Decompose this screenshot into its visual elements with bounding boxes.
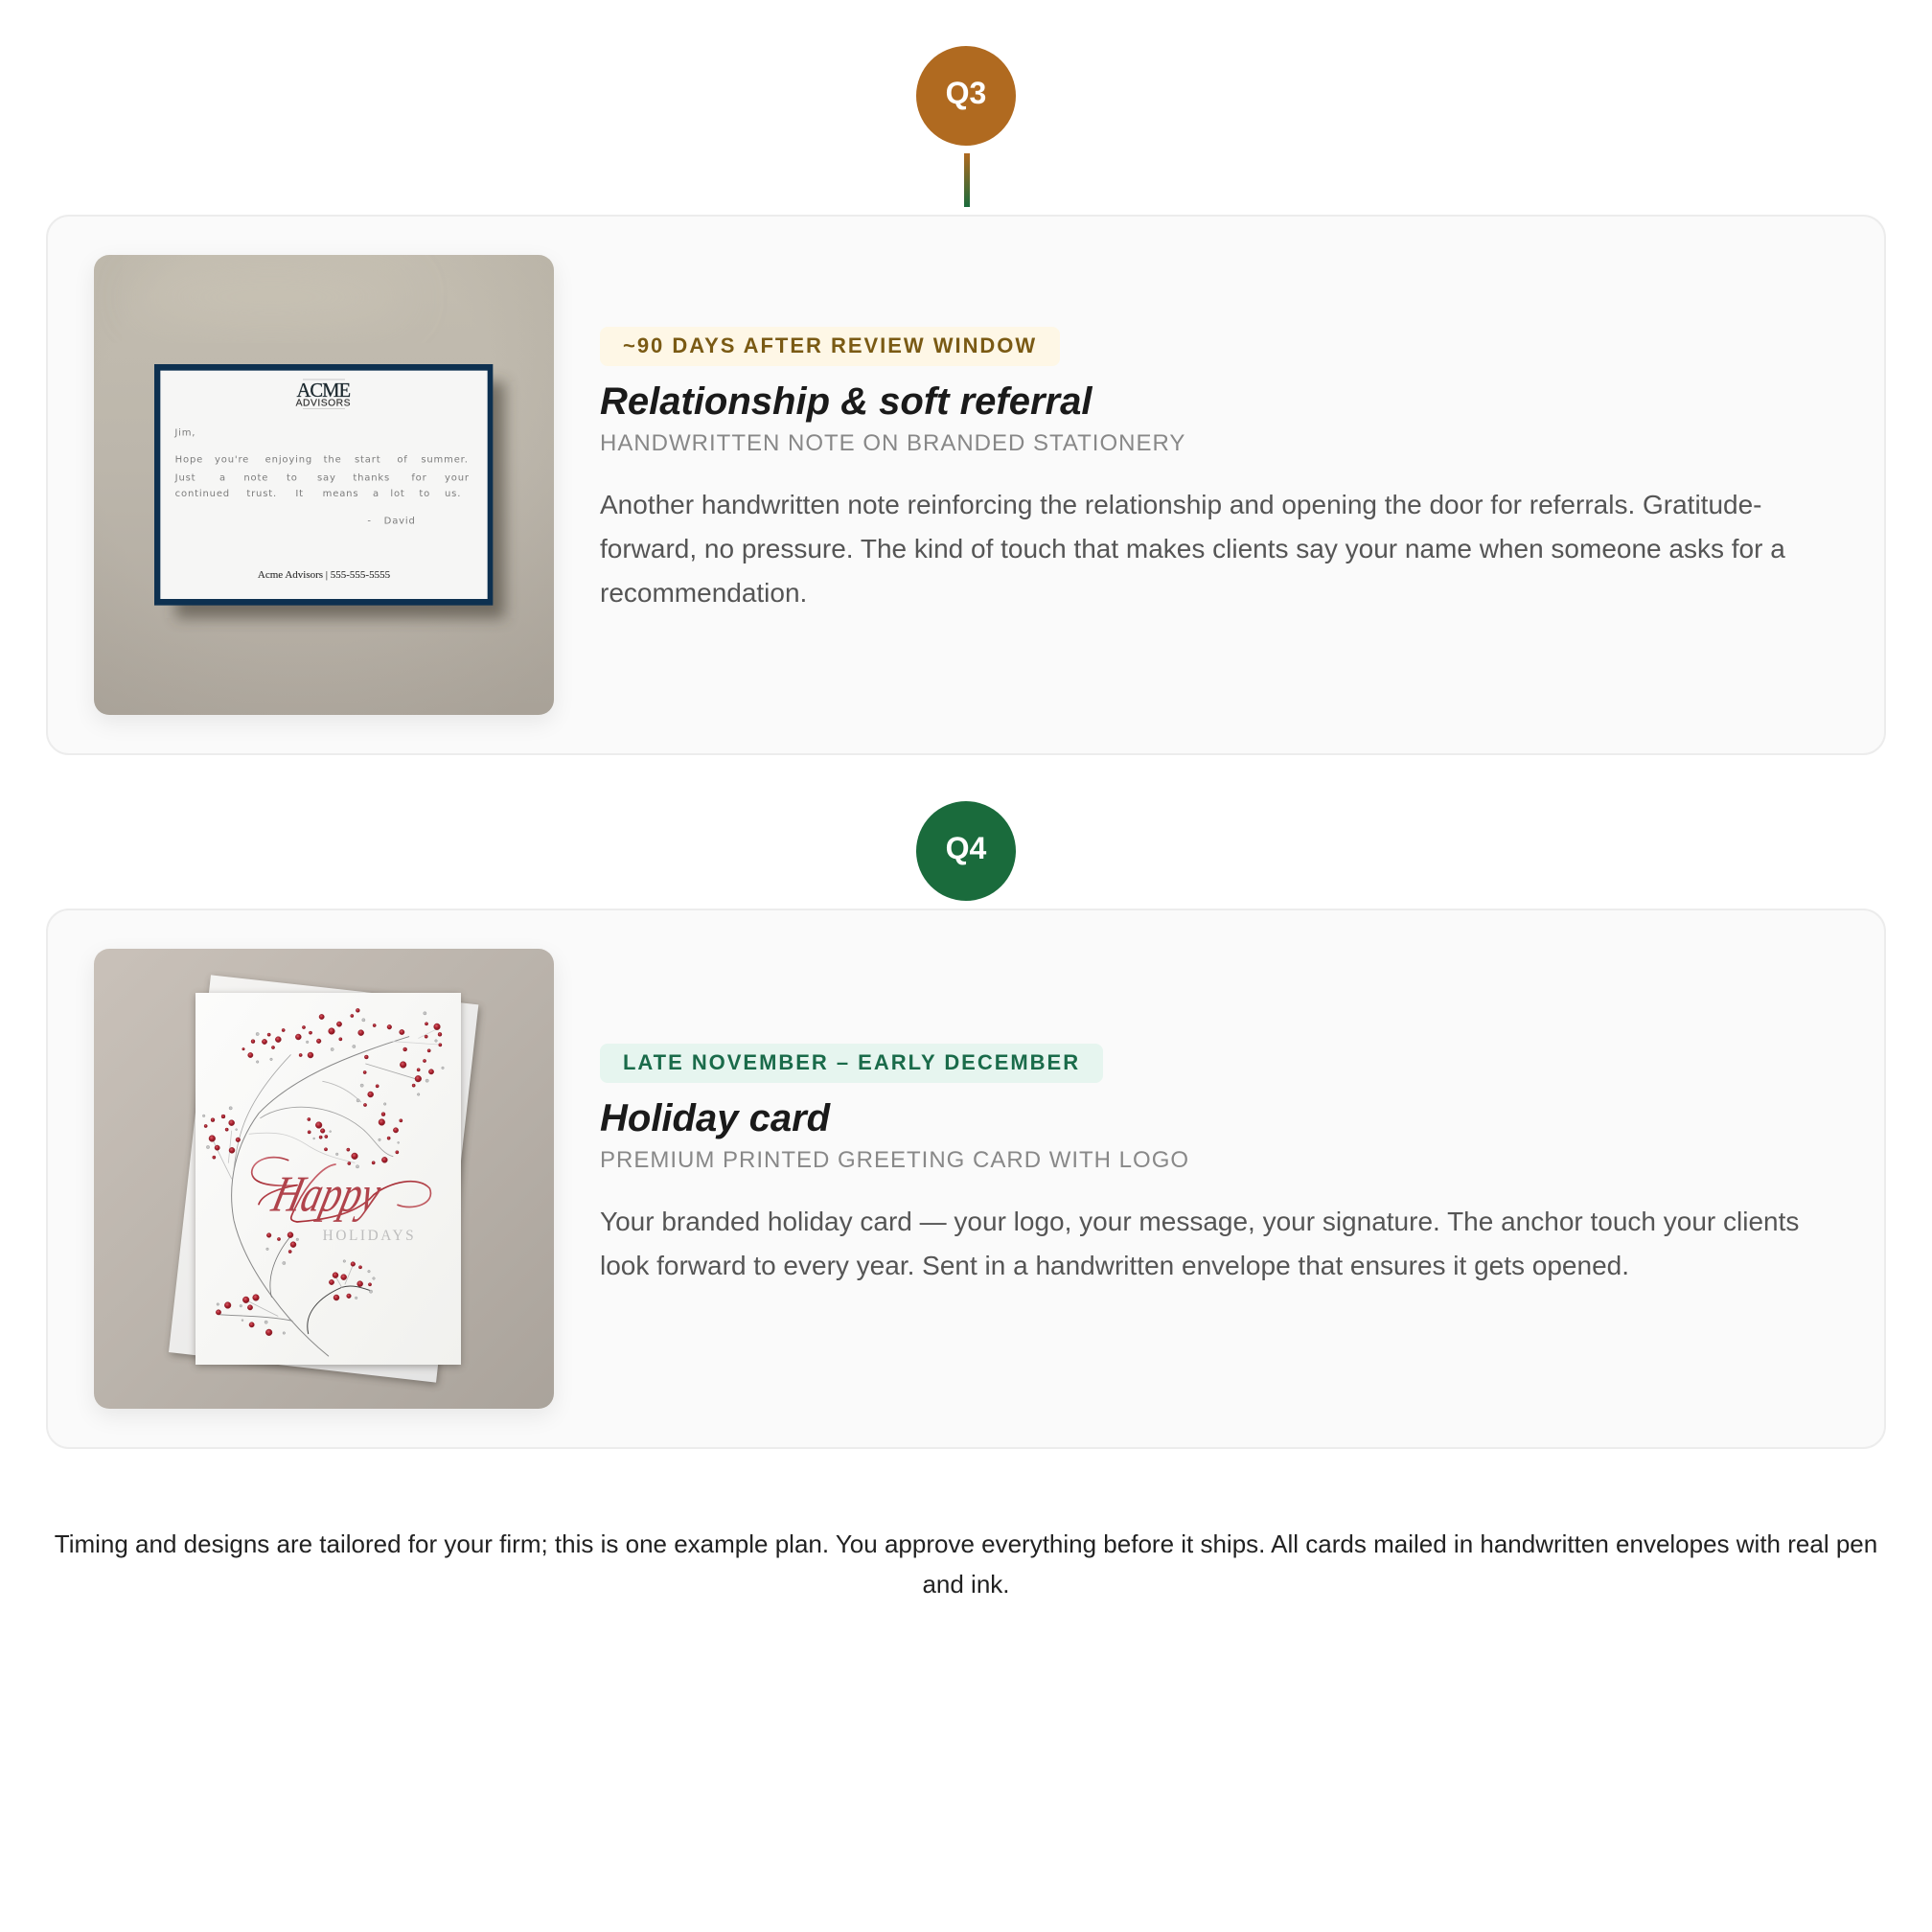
note shadow <box>175 381 505 618</box>
note card <box>154 364 493 606</box>
handwritten message: summer. <box>421 454 469 465</box>
handwritten message: you're <box>215 454 249 465</box>
handwritten message: for <box>411 472 427 483</box>
handwritten message: the <box>324 454 342 465</box>
timing pill <box>600 327 1060 366</box>
card subtitle: PREMIUM PRINTED GREETING CARD WITH LOGO <box>600 1147 1189 1173</box>
Q4 badge: Q4 <box>946 831 986 865</box>
panel: Q3 card <box>46 215 1886 755</box>
greeting script: Happy <box>266 1165 387 1222</box>
handwritten message: continued <box>175 489 230 499</box>
logo: ACME <box>296 380 351 402</box>
logo: ADVISORS <box>296 399 351 409</box>
handwritten message: Jim, <box>173 427 196 438</box>
envelope <box>170 978 480 1385</box>
handwritten message: trust. <box>246 489 277 499</box>
handwritten message: enjoying <box>265 454 312 465</box>
handwritten message: of <box>397 454 408 465</box>
timing pill <box>600 1044 1103 1083</box>
handwritten message: - <box>367 517 372 527</box>
handwritten message: say <box>317 472 336 483</box>
handwritten message: It <box>295 489 304 499</box>
Q4 badge <box>916 801 1016 901</box>
note footer: Acme Advisors | 555-555-5555 <box>258 569 391 581</box>
footnote: Timing and designs are tailored for your firm; this is one example plan. You approve everything before it ships. All cards mailed in handwritten envelopes with real pen and ink. <box>55 1530 1877 1598</box>
image: handwritten note on branded stationery <box>94 255 554 715</box>
handwritten message: your <box>445 472 470 483</box>
card title: Relationship & soft referral <box>600 380 1092 423</box>
handwritten message: means <box>323 489 358 499</box>
greeting holidays: HOLIDAYS <box>323 1228 414 1244</box>
handwritten message: Just <box>174 472 196 483</box>
timeline connector <box>964 153 970 207</box>
handwritten message: to <box>287 472 298 483</box>
Q3 badge <box>916 46 1016 146</box>
timing pill: ~90 DAYS AFTER REVIEW WINDOW <box>623 334 1037 357</box>
handwritten message: a <box>373 489 380 499</box>
silver berries <box>202 1012 444 1334</box>
handwritten message: David <box>384 517 416 527</box>
logo <box>296 380 351 409</box>
card front <box>196 993 461 1367</box>
card description: Your branded holiday card — your logo, your message, your signature. The anchor touch your clients look forward to every year. Sent in a handwritten envelope that ensures it gets opened. <box>600 1207 1799 1280</box>
Q3 badge: Q3 <box>946 76 986 110</box>
berries <box>204 1008 442 1336</box>
handwritten message: a <box>219 472 226 483</box>
card subtitle: HANDWRITTEN NOTE ON BRANDED STATIONERY <box>600 430 1185 456</box>
handwritten message: thanks <box>353 472 390 483</box>
handwritten message: start <box>355 454 380 465</box>
timing pill: LATE NOVEMBER – EARLY DECEMBER <box>623 1050 1080 1074</box>
handwritten message: Hope <box>175 454 203 465</box>
branches <box>213 1028 439 1356</box>
handwritten message: to <box>419 489 430 499</box>
greeting script flourish <box>252 1158 430 1222</box>
card title: Holiday card <box>600 1097 830 1139</box>
handwritten message: lot <box>390 489 405 499</box>
image: holiday greeting card <box>94 949 554 1409</box>
handwritten message: note <box>243 472 268 483</box>
panel: Q4 card <box>46 908 1886 1449</box>
card description: Another handwritten note reinforcing the relationship and opening the door for referrals. Gratitude-forward, no pressure. The kind of touch that makes clients say your name when someone asks for a recommendation. <box>600 490 1785 608</box>
handwritten message: us. <box>445 489 461 499</box>
